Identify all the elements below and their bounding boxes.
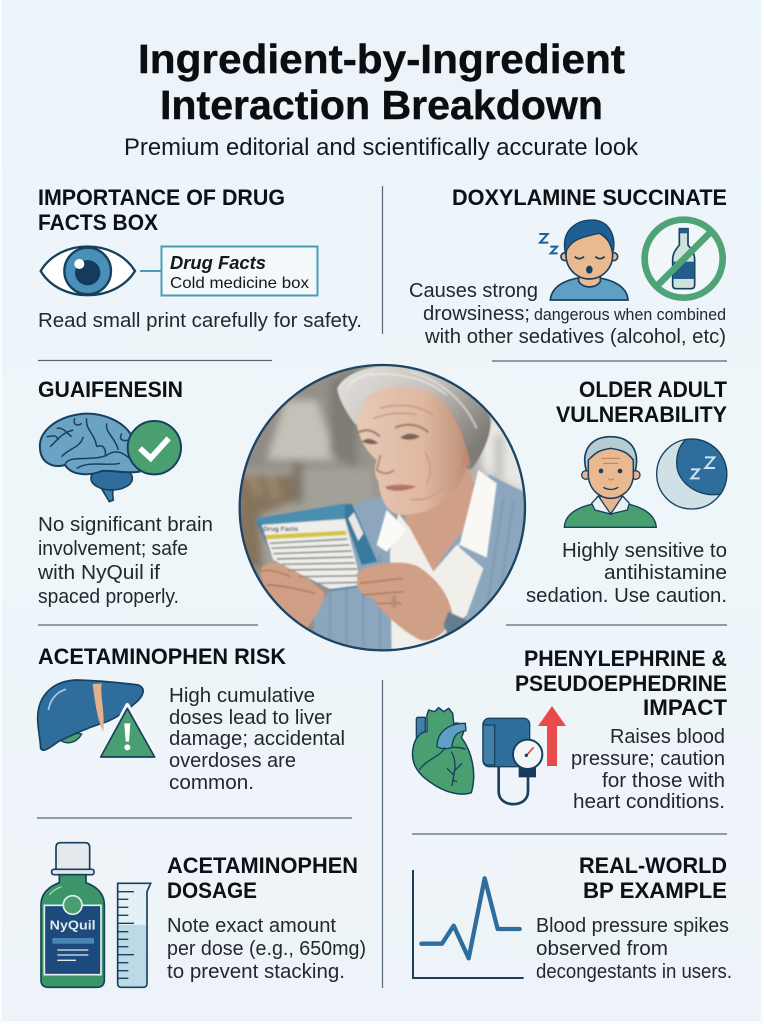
body text: Read small print carefully for safety. bbox=[38, 310, 362, 332]
heading: older adult: OLDER ADULT bbox=[579, 377, 728, 402]
body text: No significant brain bbox=[38, 514, 213, 536]
title bbox=[138, 36, 625, 128]
panel: phenylephrine and pseudoephedrine impact bbox=[413, 646, 728, 813]
body text: dangerous when combined bbox=[534, 305, 726, 324]
icon: moon with z bbox=[657, 439, 727, 509]
body text: spaced properly. bbox=[38, 586, 179, 608]
body text: Note exact amount bbox=[167, 915, 336, 937]
connector line bbox=[140, 270, 162, 272]
icon: measuring cylinder bbox=[118, 883, 151, 987]
body text: doses lead to liver bbox=[169, 707, 332, 729]
icon: NyQuil bottle bbox=[41, 843, 104, 987]
body text: involvement; safe bbox=[38, 538, 188, 560]
heading: real-world BP: BP EXAMPLE bbox=[583, 878, 727, 903]
drug facts label: Drug Facts bbox=[170, 253, 266, 273]
icon: brain with check bbox=[40, 414, 181, 502]
blouse bbox=[390, 513, 483, 652]
body text bbox=[571, 726, 725, 813]
heading: acetaminophen dosage: ACETAMINOPHEN bbox=[167, 853, 358, 878]
body text: to prevent stacking. bbox=[167, 961, 345, 983]
body text: pressure; caution bbox=[571, 748, 725, 770]
heading: real-world BP: REAL-WORLD bbox=[579, 853, 727, 878]
heading: acetaminophen risk: ACETAMINOPHEN RISK bbox=[38, 644, 286, 669]
panel: doxylamine succinate bbox=[409, 185, 727, 348]
panel: acetaminophen dosage bbox=[41, 843, 366, 987]
central photo: older woman reading a medicine box bbox=[230, 355, 530, 660]
panel: older adult vulnerability bbox=[526, 377, 728, 607]
body text bbox=[409, 280, 726, 348]
body text: damage; accidental bbox=[169, 728, 345, 750]
face bbox=[356, 384, 467, 515]
body text: antihistamine bbox=[604, 562, 727, 584]
body text: overdoses are bbox=[169, 750, 296, 772]
heading: acetaminophen dosage: DOSAGE bbox=[167, 878, 257, 903]
cardigan bbox=[313, 475, 530, 660]
drug facts label bbox=[162, 246, 318, 296]
left hand bbox=[260, 562, 325, 632]
panel: acetaminophen risk bbox=[38, 644, 345, 794]
body text: drowsiness; bbox=[423, 303, 530, 325]
icon: liver with warning bbox=[38, 680, 157, 757]
body text: High cumulative bbox=[169, 685, 315, 707]
body text bbox=[167, 915, 366, 983]
body text: per dose (e.g., 650mg) bbox=[167, 938, 366, 960]
icon: no alcohol bbox=[645, 220, 723, 298]
icon: sleeping person bbox=[539, 220, 628, 300]
body text: heart conditions. bbox=[573, 791, 725, 813]
icon: older man bbox=[564, 437, 656, 527]
heading: older adult: VULNERABILITY bbox=[556, 402, 727, 427]
body text bbox=[536, 915, 732, 983]
icon: blood pressure cuff bbox=[483, 718, 542, 804]
central photo: older woman reading a medicine box: Drug Facts bbox=[263, 526, 298, 533]
panel: importance of drug facts box bbox=[38, 185, 362, 332]
hair mass behind the head bbox=[464, 438, 471, 470]
title: Ingredient-by-Ingredient bbox=[138, 36, 625, 82]
right hand bbox=[357, 562, 453, 641]
body text: common. bbox=[169, 772, 254, 794]
box bbox=[255, 503, 352, 525]
heading: doxylamine: DOXYLAMINE SUCCINATE bbox=[452, 185, 727, 210]
body text: for those with bbox=[602, 770, 725, 792]
body text: Causes strong bbox=[409, 280, 538, 302]
icon: heart bbox=[413, 708, 474, 794]
heading: guaifenesin: GUAIFENESIN bbox=[38, 377, 183, 402]
heading: drug facts box: IMPORTANCE OF DRUG bbox=[38, 185, 285, 210]
heading: phenylephrine: PSEUDOEPHEDRINE bbox=[515, 671, 727, 696]
body text: Raises blood bbox=[610, 726, 725, 748]
body text bbox=[526, 540, 727, 607]
heading: phenylephrine: PHENYLEPHRINE & bbox=[524, 646, 727, 671]
body text: Highly sensitive to bbox=[562, 540, 727, 562]
body text: with other sedatives (alcohol, etc) bbox=[424, 326, 726, 348]
panel: real-world BP example bbox=[413, 853, 732, 983]
drug facts label: Cold medicine box bbox=[170, 275, 309, 292]
body text bbox=[169, 685, 345, 794]
icon: eye bbox=[41, 246, 135, 295]
body text: with NyQuil if bbox=[37, 562, 160, 584]
title: Interaction Breakdown bbox=[160, 82, 603, 128]
heading: phenylephrine: IMPACT bbox=[643, 695, 728, 720]
subtitle: Premium editorial and scientifically accurate look bbox=[124, 134, 639, 161]
body text: observed from bbox=[536, 938, 668, 960]
heading: drug facts box: FACTS BOX bbox=[38, 210, 158, 235]
body text: sedation. Use caution. bbox=[526, 585, 727, 607]
icon: NyQuil bottle: NyQuil bbox=[50, 918, 96, 933]
panel: guaifenesin bbox=[37, 377, 213, 608]
body text bbox=[37, 514, 213, 608]
icon: red up arrow bbox=[538, 706, 566, 766]
body text: decongestants in users. bbox=[536, 961, 732, 983]
neck bbox=[403, 468, 478, 572]
body text: Blood pressure spikes bbox=[536, 915, 729, 937]
hair bbox=[337, 365, 491, 470]
line chart: blood pressure spike bbox=[413, 870, 524, 978]
